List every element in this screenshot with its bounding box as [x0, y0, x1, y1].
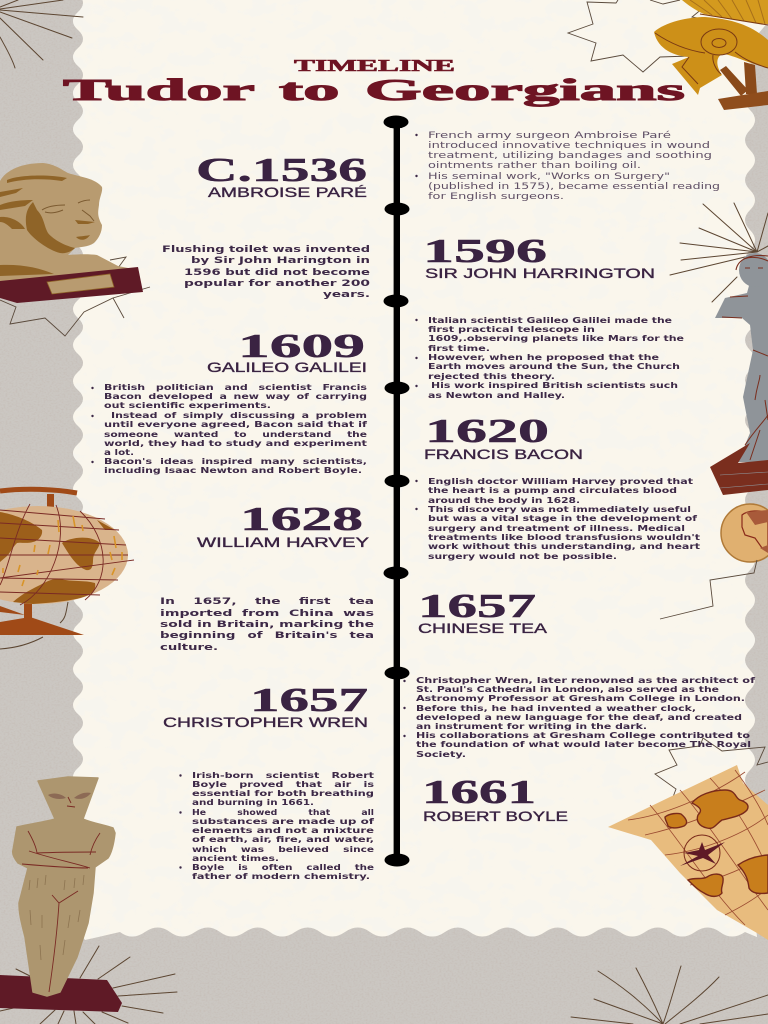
text block: Christopher Wren: developed a new language for the deaf, and created [416, 713, 742, 722]
icon: star outline behind bust [0, 257, 150, 336]
entry: Chinese tea heading: CHINESE TEA [418, 620, 548, 636]
text block: Robert Boyle: substances are made up of [192, 817, 375, 826]
text block: Ambroise Paré: for English surgeons. [428, 192, 564, 202]
text block: Christopher Wren [403, 676, 756, 759]
text block: Robert Boyle: Boyle proved that air is [192, 780, 374, 789]
text block: Francis Bacon: a lot. [104, 448, 134, 457]
text block: flushing toilet: popular for another 200 [184, 279, 370, 289]
text block: Francis Bacon: Bacon's ideas inspired many scientists, [104, 457, 367, 466]
text block: Robert Boyle: of earth, air, fire, and water, [192, 835, 374, 844]
text block: Christopher Wren: an instrument for writing in the dark. [416, 722, 647, 731]
text block: Francis Bacon [91, 383, 368, 475]
entry: Ambroise Paré heading: C.1536 [196, 152, 367, 189]
text block: Francis Bacon: including Isaac Newton and Robert Boyle. [104, 466, 362, 475]
timeline spine with nodes [384, 116, 410, 866]
text block: William Harvey: the heart is a pump and circulates blood [428, 486, 677, 495]
text block: Robert Boyle: ancient times. [192, 854, 279, 863]
icon: grey statue on red plinth [710, 253, 768, 495]
entry: Christopher Wren heading: CHRISTOPHER WREN [163, 714, 368, 730]
entry: Francis Bacon heading: 1620 [425, 413, 549, 450]
text block: Francis Bacon: out scientific experiments. [104, 401, 271, 410]
title: TIMELINE [294, 56, 455, 75]
entry: Francis Bacon heading [424, 413, 583, 462]
text block: Ambroise Paré: ointments rather than boiling oil. [428, 161, 641, 171]
text block: Christopher Wren: Before this, he had invented a weather clock, [416, 704, 696, 713]
icon: star outline behind helmet [568, 0, 703, 72]
text block: Christopher Wren: Christopher Wren, later renowned as the architect of [416, 676, 756, 685]
entry: Sir John Harrington heading [423, 233, 655, 281]
text block: Chinese tea: In 1657, the first tea [160, 597, 374, 607]
text block: Galileo Galilei [415, 316, 685, 400]
text block: Chinese tea: culture. [160, 643, 218, 653]
text block: William Harvey: around the body in 1628. [428, 496, 580, 505]
text block: Francis Bacon: someone wanted to understand the [104, 430, 368, 439]
entry: Robert Boyle heading: ROBERT BOYLE [423, 808, 568, 824]
text block: Galileo Galilei: first practical telescope in [428, 325, 595, 334]
text block: Robert Boyle: elements and not a mixture [192, 826, 375, 835]
text block: Francis Bacon: world, they had to study and experiment [104, 439, 367, 448]
entry: Robert Boyle heading: 1661 [422, 774, 536, 811]
text block: Robert Boyle: essential for both breathing [192, 789, 374, 798]
text block: Ambroise Paré: French army surgeon Ambroise Paré [428, 130, 671, 141]
text block: Ambroise Paré: His seminal work, "Works on Surgery" [428, 172, 670, 182]
icon: Roman helmet with wooden stand [654, 0, 768, 110]
entry: Ambroise Paré heading: AMBROISE PARÉ [208, 184, 367, 200]
entry: William Harvey heading: 1628 [240, 501, 363, 538]
entry: William Harvey heading: WILLIAM HARVEY [197, 534, 370, 550]
entry: William Harvey heading [197, 501, 370, 550]
text block: flushing toilet: 1596 but did not become [184, 268, 370, 278]
text block: Robert Boyle: Boyle is often called the [192, 863, 375, 872]
icon: maroon plinth [0, 975, 122, 1012]
text block: Chinese tea: beginning of Britain's tea [160, 631, 374, 641]
entry: Christopher Wren heading [163, 682, 368, 730]
text block: Galileo Galilei: 1609,.observing planets like Mars for the [428, 334, 685, 343]
text block: Ambroise Paré: treatment, utilizing bandages and soothing [428, 151, 712, 161]
text block: William Harvey: work without this understanding, and heart [428, 542, 700, 551]
icon: star outline behind map [655, 738, 768, 797]
text block: flushing toilet: years. [323, 290, 370, 300]
icon: cameo coin portrait [721, 504, 768, 562]
icon: globe on stand [0, 489, 134, 649]
text block: Francis Bacon: Bacon developed a new way of carrying [104, 392, 367, 401]
entry: Galileo Galilei heading: GALILEO GALILEI [207, 359, 367, 375]
text block: Robert Boyle: which was believed since [192, 845, 375, 854]
decorative rays: around bottom statue [0, 946, 177, 1024]
text block: William Harvey: but was a vital stage in the development of [428, 514, 698, 523]
text block: Francis Bacon: until everyone agreed, Bacon said that if [104, 420, 368, 429]
text block: Galileo Galilei: Italian scientist Galileo Galilei made the [428, 316, 673, 325]
text block: Robert Boyle: Irish-born scientist Robert [192, 771, 374, 780]
entry: Galileo Galilei heading: 1609 [238, 328, 365, 365]
title: Tudor to Georgians [63, 72, 685, 107]
entry: Sir John Harrington heading: 1596 [423, 233, 547, 270]
text block: William Harvey: surgery would not be possible. [428, 552, 617, 561]
text block: Galileo Galilei: first time. [428, 344, 490, 353]
text block: William Harvey: This discovery was not immediately useful [428, 505, 691, 514]
text block: Galileo Galilei: However, when he proposed that the [428, 353, 660, 362]
decorative rays: bottom right [571, 966, 768, 1024]
text block: flushing toilet [162, 245, 370, 300]
text block: Chinese tea: imported from China was [160, 609, 374, 619]
entry: Chinese tea heading [418, 588, 548, 636]
text block: flushing toilet: by Sir John Harington in [191, 256, 370, 266]
text block: Galileo Galilei: His work inspired British scientists such [431, 381, 678, 390]
entry: Francis Bacon heading: FRANCIS BACON [424, 446, 583, 462]
text block: Christopher Wren: St. Paul's Cathedral in London, also served as the [416, 685, 720, 694]
entry: Robert Boyle heading [422, 774, 568, 824]
text block: Robert Boyle: father of modern chemistry. [192, 872, 370, 881]
entry: Christopher Wren heading: 1657 [250, 682, 368, 719]
text block: Ambroise Paré: (published in 1575), became essential reading [428, 182, 720, 192]
entry: Ambroise Paré heading [196, 152, 367, 200]
text block: Chinese tea [160, 597, 374, 653]
text block: Ambroise Paré [415, 130, 720, 202]
text block: William Harvey [415, 477, 700, 561]
entry: Galileo Galilei heading [207, 328, 367, 375]
icon: tan figurine statue [13, 777, 115, 996]
text block: Galileo Galilei: Earth moves around the Sun, the Church [428, 362, 680, 371]
text block: William Harvey: English doctor William Harvey proved that [428, 477, 693, 486]
entry: Chinese tea heading: 1657 [418, 588, 536, 625]
text block: flushing toilet: Flushing toilet was invented [162, 245, 370, 255]
text block: Galileo Galilei: rejected this theory. [428, 372, 555, 381]
text block: William Harvey: treatments like blood transfusions wouldn't [428, 533, 700, 542]
text block: William Harvey: surgery and treatment of illness. Medical [428, 524, 685, 533]
icon: classical bust on maroon plinth [0, 163, 143, 303]
text block: Christopher Wren: His collaborations at Gresham College contributed to [416, 731, 751, 740]
entry: Sir John Harrington heading: SIR JOHN HARRINGTON [425, 265, 655, 281]
text block: Christopher Wren: the foundation of what would later become The Royal [416, 740, 751, 749]
text block: Francis Bacon: British politician and scientist Francis [104, 383, 367, 392]
text block: Christopher Wren: Society. [416, 750, 466, 759]
text block: Robert Boyle [179, 771, 375, 881]
text block: Galileo Galilei: as Newton and Halley. [428, 391, 565, 400]
icon: treasure map with compass [608, 765, 768, 940]
decorative line below coin [660, 560, 757, 619]
text block: Francis Bacon: Instead of simply discussing a problem [111, 411, 367, 420]
decorative rays: top left [0, 0, 83, 68]
text block: Robert Boyle: He showed that all [192, 808, 374, 817]
text block: Christopher Wren: Astronomy Professor at Gresham College in London. [416, 694, 745, 703]
text block: Chinese tea: sold in Britain, marking the [160, 620, 374, 630]
text block: Ambroise Paré: introduced innovative techniques in wound [428, 141, 710, 151]
text block: Robert Boyle: and burning in 1661. [192, 798, 314, 807]
icon: sunburst rays above right statue [670, 203, 768, 302]
title [63, 56, 685, 107]
